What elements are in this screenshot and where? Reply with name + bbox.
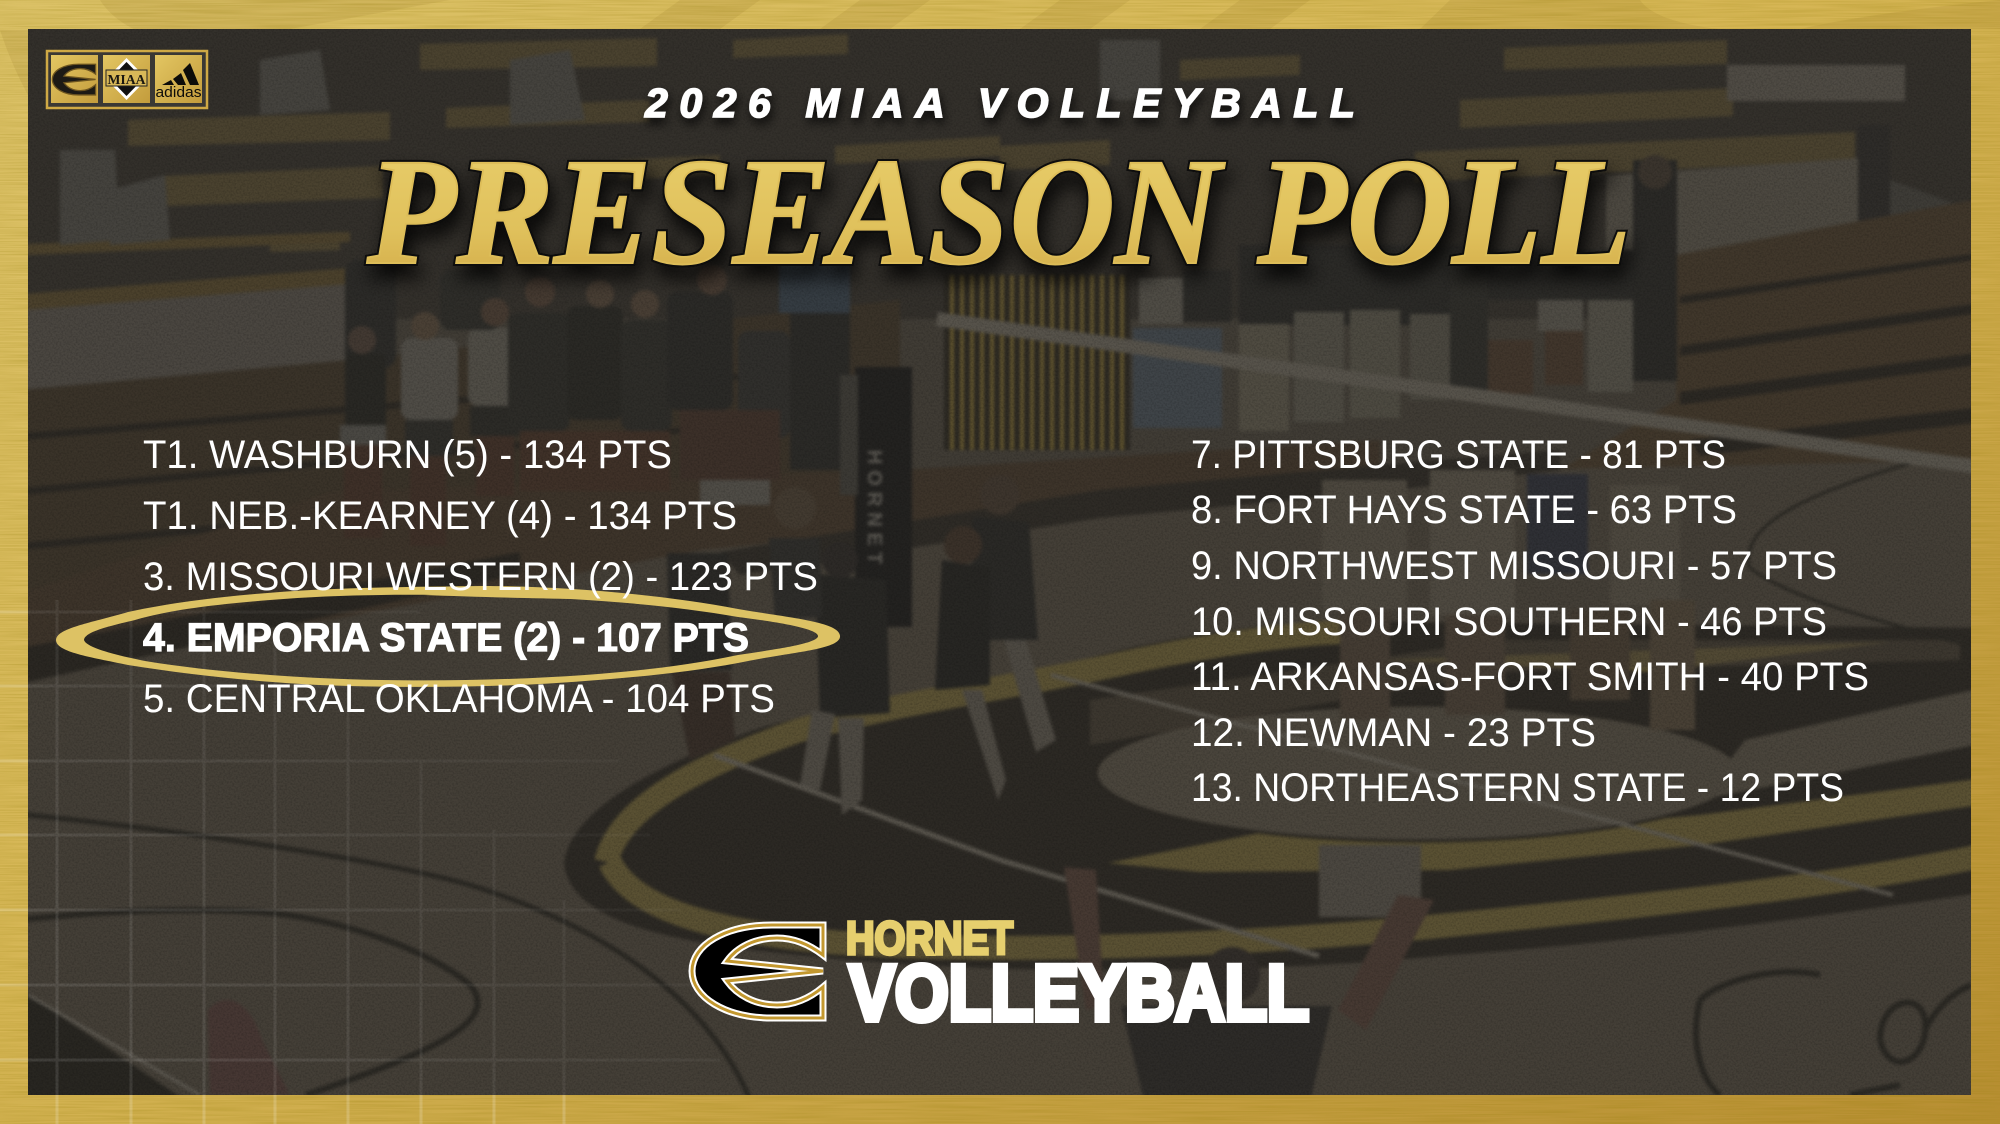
poll row T1 Neb.-Kearney: T1. NEB.-KEARNEY (4) - 134 PTS	[143, 494, 737, 538]
poll row 5 Central Oklahoma: 5. CENTRAL OKLAHOMA - 104 PTS	[143, 677, 775, 721]
court lines	[0, 460, 1971, 1124]
left wall	[28, 284, 346, 388]
icon: Emporia E tile	[51, 55, 98, 103]
floor E logo stripes	[564, 620, 2000, 970]
standing crowd on left	[340, 261, 850, 506]
faint grid overlay	[28, 600, 720, 1095]
hand-drawn gold oval highlight	[56, 586, 840, 687]
volleyball net tape	[937, 319, 2000, 470]
spectators in striped pants	[944, 275, 1130, 450]
icon: MIAA tile: MIAA	[108, 73, 146, 88]
net post with HORNET pad: HORNET	[863, 450, 885, 570]
poll row 3 Missouri Western: 3. MISSOURI WESTERN (2) - 123 PTS	[143, 555, 818, 599]
poll row 13 Northeastern State: 13. NORTHEASTERN STATE - 12 PTS	[1191, 766, 1844, 810]
eyebrow heading: 2026 MIAA VOLLEYBALL	[644, 80, 1355, 126]
poll row T1 Washburn: T1. WASHBURN (5) - 134 PTS	[143, 433, 672, 477]
dark corner at lower left	[28, 994, 200, 1095]
poll row 4 Emporia State highlighted: 4. EMPORIA STATE (2) - 107 PTS	[143, 616, 749, 660]
opposing players in white	[1322, 470, 1695, 730]
poll row 8 Fort Hays State: 8. FORT HAYS STATE - 63 PTS	[1191, 488, 1737, 532]
icon: adidas tile: adidas	[156, 85, 202, 101]
wordmark VOLLEYBALL: VOLLEYBALL	[849, 948, 1309, 1037]
right poll column	[1191, 433, 1869, 810]
icon: adidas tile	[155, 55, 202, 103]
referee with raised arms	[1064, 845, 1434, 1095]
upper right wall panels	[1606, 64, 1948, 255]
left poll column	[143, 433, 818, 721]
wordmark HORNET: HORNET	[846, 912, 1013, 964]
icon: MIAA tile	[103, 55, 150, 103]
Hornet Volleyball logo lockup	[692, 912, 1309, 1037]
poll row 9 Northwest Missouri: 9. NORTHWEST MISSOURI - 57 PTS	[1191, 544, 1837, 588]
lower bleacher benches	[28, 201, 1971, 590]
court floor	[28, 442, 1926, 682]
poll row 7 Pittsburg State: 7. PITTSBURG STATE - 81 PTS	[1191, 433, 1726, 477]
poll row 12 Newman: 12. NEWMAN - 23 PTS	[1191, 711, 1596, 755]
poll row 11 Arkansas-Fort Smith: 11. ARKANSAS-FORT SMITH - 40 PTS	[1191, 655, 1869, 699]
main title: PRESEASON POLL	[366, 128, 1631, 297]
standing crowd on right	[1133, 155, 1677, 431]
net post with HORNET pad	[840, 367, 912, 627]
home players in dark uniforms	[667, 475, 1056, 815]
bleachers	[28, 29, 1971, 318]
icon: Emporia E logo	[692, 925, 823, 1018]
logo strip with Emporia, MIAA and adidas marks	[47, 51, 207, 108]
main title: PRESEASON POLL	[366, 128, 1631, 297]
poll row 10 Missouri Southern: 10. MISSOURI SOUTHERN - 46 PTS	[1191, 600, 1827, 644]
